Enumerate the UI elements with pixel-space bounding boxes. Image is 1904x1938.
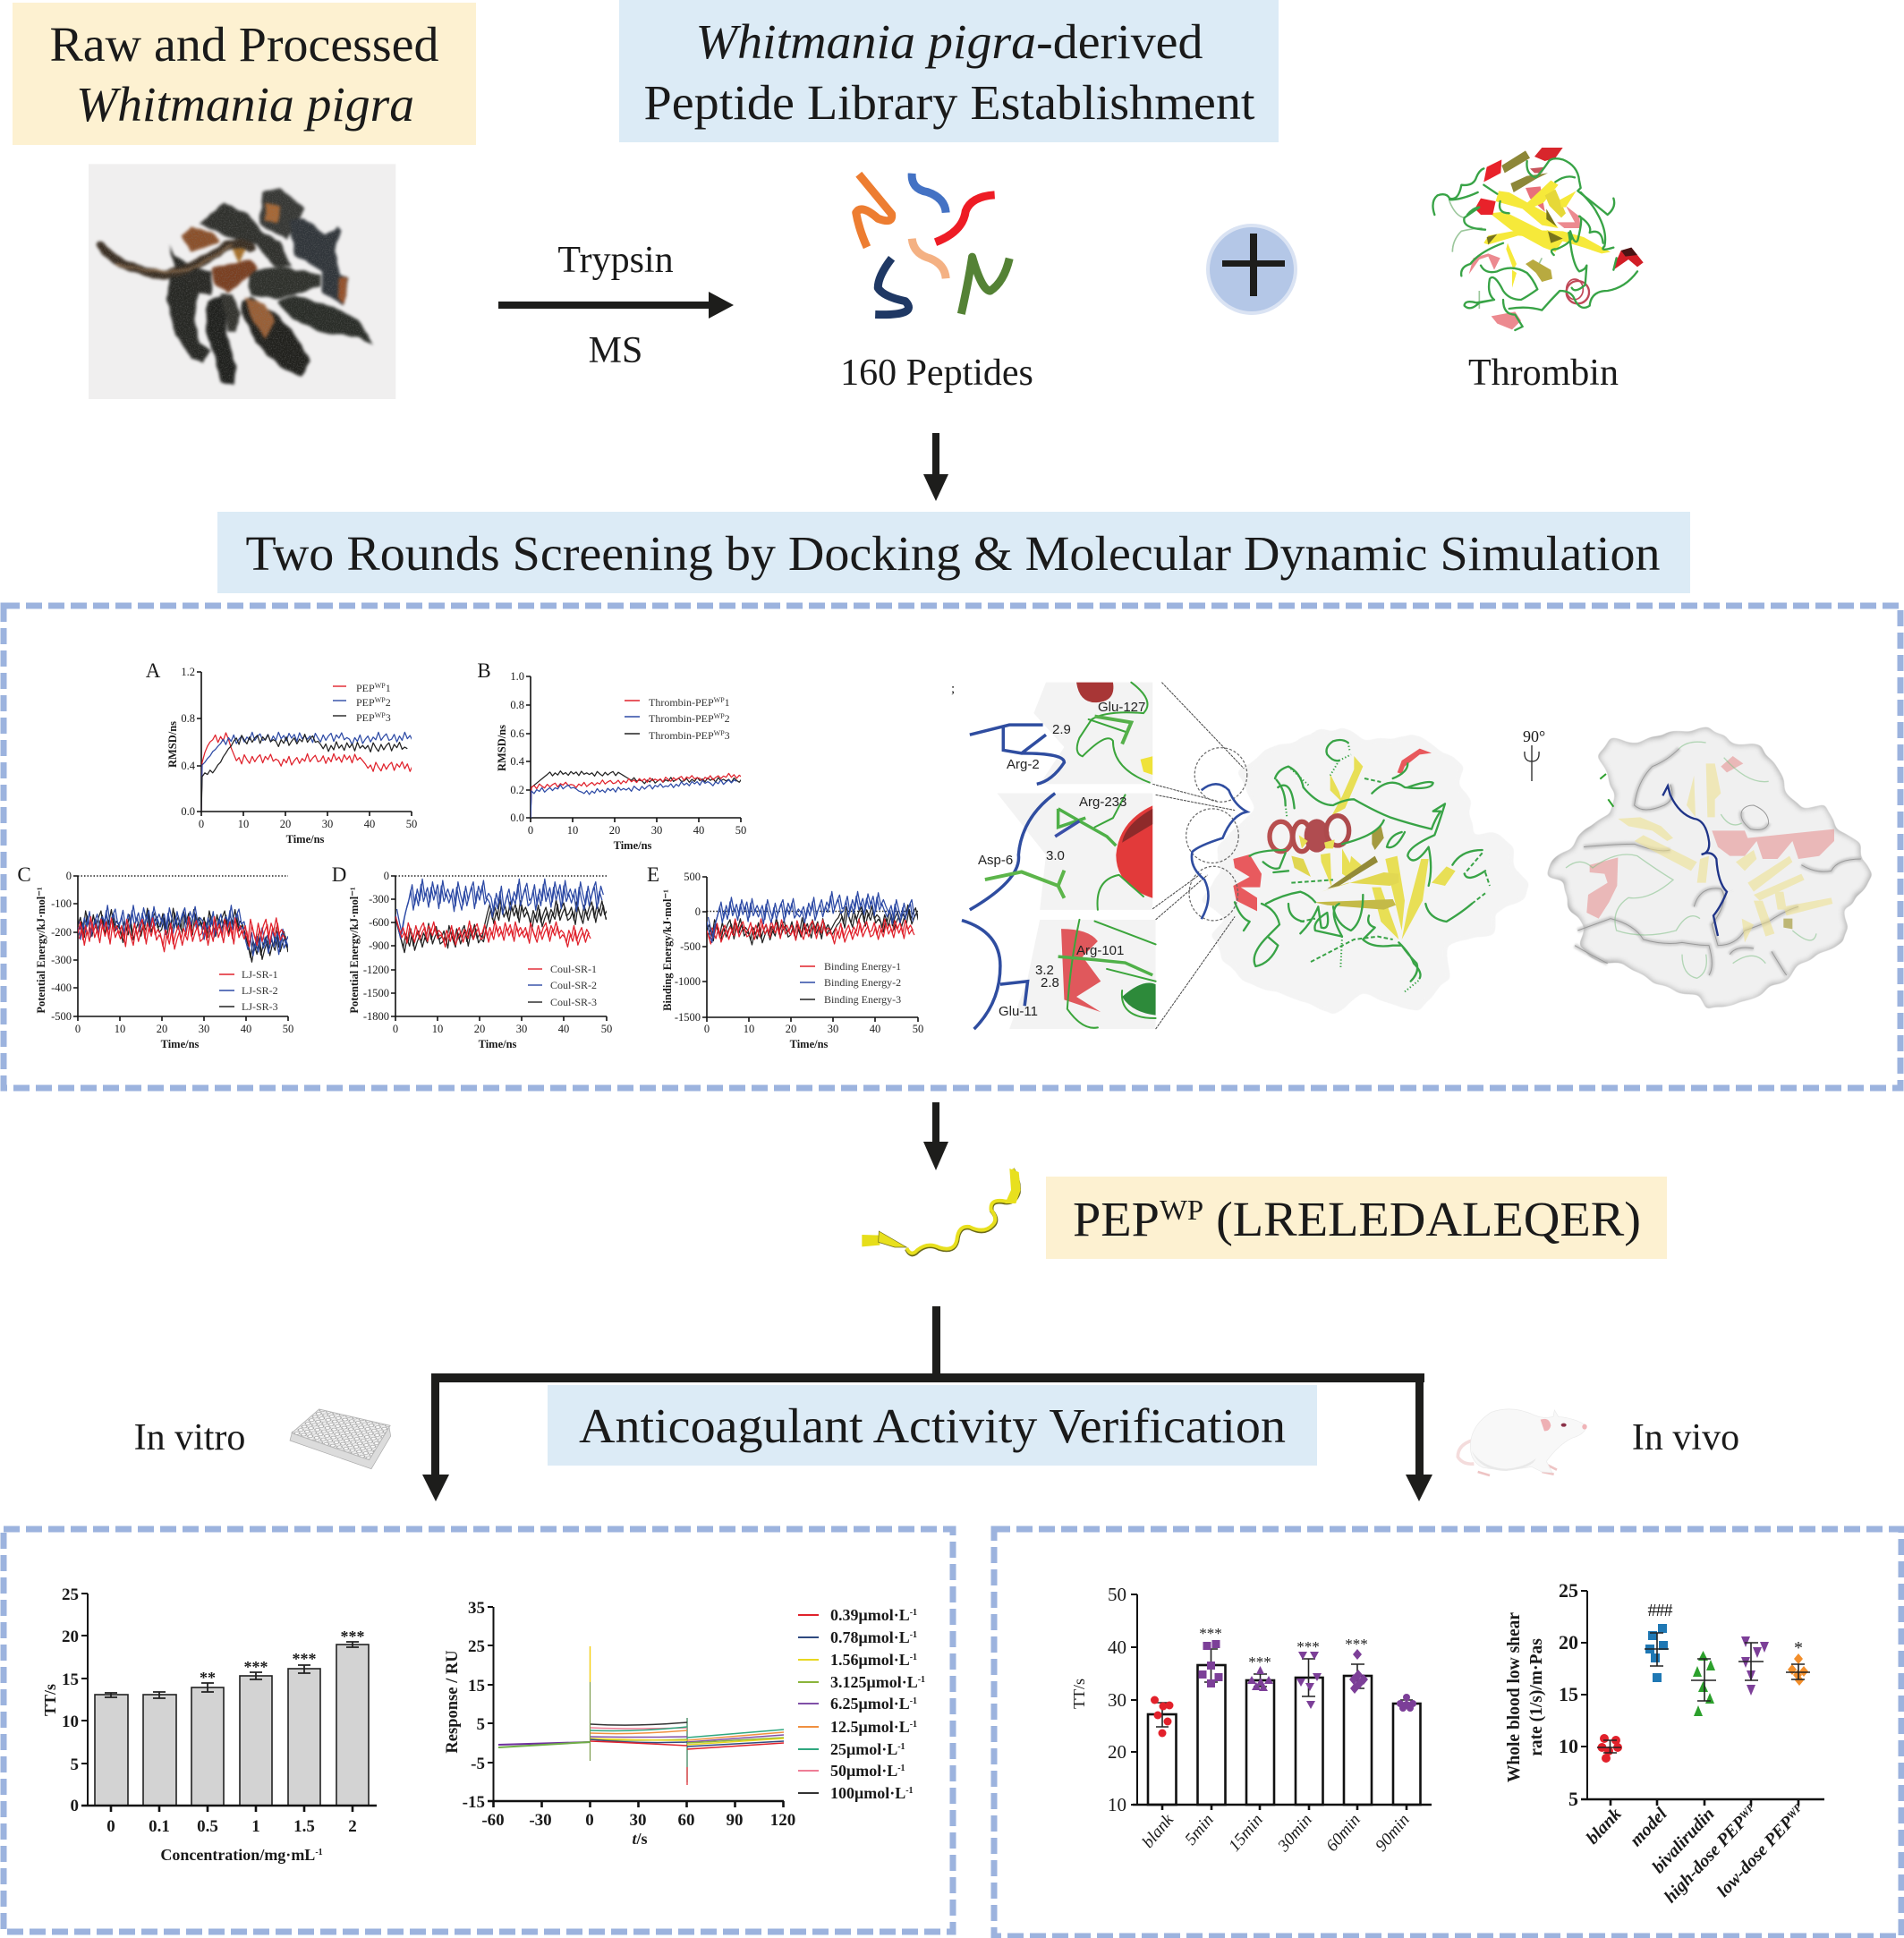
chart C: LJ-SR potential energy: -300 [51, 954, 72, 966]
line chart: SPR sensorgram: 50μmol·L [830, 1762, 897, 1780]
chart B: complex RMSD: 0.4 [510, 755, 525, 768]
bar chart: TT over time: 30 [1108, 1689, 1126, 1711]
chart A: peptide RMSD: 0.0 [181, 805, 195, 818]
chart C: LJ-SR potential energy: 50 [283, 1023, 293, 1035]
inset: Arg-2 Glu-127 contact: 2.9 [1052, 722, 1071, 737]
label: In vitro: In vitro [134, 1417, 245, 1458]
bar chart: TT over time: 60min [1322, 1811, 1364, 1856]
bar chart: TT vs concentration: 0.1 [149, 1817, 170, 1836]
bar chart: TT over time: *** [1248, 1653, 1271, 1670]
chart B: complex RMSD: Time/ns [614, 839, 652, 852]
line chart: SPR sensorgram: -1 [910, 1720, 917, 1730]
bar chart: TT vs concentration: TT/s [41, 1684, 59, 1716]
line chart: SPR sensorgram: 1.56μmol·L [830, 1651, 910, 1669]
chart D: Coul-SR potential energy: -900 [369, 939, 389, 952]
chart C: LJ-SR potential energy: Time/ns [161, 1038, 200, 1050]
chart B: complex RMSD: 2 [725, 712, 730, 725]
chart A: peptide RMSD: 10 [238, 818, 249, 830]
chart A: peptide RMSD: A [146, 659, 161, 682]
icon: microplate [290, 1409, 391, 1469]
chart B: complex RMSD: WP [714, 729, 725, 737]
line chart: SPR sensorgram: 0 [585, 1811, 594, 1830]
inset: Glu-11 Arg-101 contact: 2.8 [1041, 975, 1059, 990]
chart D: Coul-SR potential energy: Potential Energy/kJ·mol⁻¹ [348, 887, 361, 1014]
scatter plot: whole blood low shear rate: 10 [1559, 1735, 1578, 1757]
heading: PEP WP sequence: (LRELEDALEQER) [1203, 1192, 1641, 1246]
line chart: SPR sensorgram: -1 [910, 1630, 917, 1640]
scatter plot: whole blood low shear rate: WP [1784, 1801, 1805, 1822]
chart A: peptide RMSD: 3 [386, 711, 391, 724]
peptide chain and binding-site callouts [1152, 683, 1247, 1029]
heading: PEP WP sequence: PEP [1073, 1192, 1158, 1246]
bar chart: TT over time: 50 [1108, 1584, 1126, 1605]
heading: peptide library establishment [619, 0, 1279, 142]
inset: Glu-11 Arg-101 contact: Glu-11 [999, 1004, 1038, 1019]
line chart: SPR sensorgram: 120 [770, 1811, 795, 1830]
chart A: peptide RMSD: 50 [406, 818, 417, 830]
heading: Raw and Processed Whitmania pigra [13, 3, 476, 145]
icon: peptide fragments [856, 174, 1009, 315]
line chart: SPR sensorgram: 5 [476, 1715, 485, 1734]
bar chart: TT over time: *** [1345, 1636, 1368, 1653]
chart A: peptide RMSD: 0 [199, 818, 204, 830]
bar chart: TT over time: blank [1139, 1810, 1177, 1852]
bar chart: TT vs concentration [41, 1585, 377, 1864]
bar chart: TT over time: TT/s [1070, 1679, 1088, 1709]
scatter plot: whole blood low shear rate: 15 [1559, 1683, 1578, 1705]
chart C: LJ-SR potential energy: 0 [75, 1023, 81, 1035]
scatter plot: whole blood low shear rate: 5 [1568, 1788, 1578, 1810]
arrow: down to screening [923, 433, 948, 501]
chart E: binding energy: -1500 [675, 1011, 701, 1024]
line chart: SPR sensorgram: -1 [910, 1653, 917, 1662]
label: In vivo: In vivo [1632, 1417, 1739, 1458]
bar chart: TT over time: 40 [1108, 1636, 1126, 1658]
chart C: LJ-SR potential energy: LJ-SR-2 [242, 984, 278, 997]
chart D: Coul-SR potential energy: -300 [369, 893, 389, 905]
chart A: peptide RMSD: PEP [356, 696, 375, 709]
scatter plot: whole blood low shear rate: high-dose PEP [1661, 1813, 1750, 1907]
chart D: Coul-SR potential energy: -1200 [363, 964, 389, 976]
chart A: peptide RMSD: WP [375, 682, 386, 690]
bar chart: TT vs concentration: 0 [106, 1817, 115, 1836]
chart B: complex RMSD: 0 [528, 824, 533, 837]
chart B: complex RMSD [477, 659, 746, 852]
panel: docking and molecular dynamics [4, 606, 1900, 1088]
label: 160 Peptides: 160 Peptides [840, 353, 1033, 394]
chart B: complex RMSD: Thrombin-PEP [649, 712, 714, 725]
chart E: binding energy: -500 [680, 940, 701, 953]
bar chart: TT vs concentration: 1 [251, 1817, 260, 1836]
scatter plot: whole blood low shear rate: low-dose PEP [1713, 1813, 1798, 1901]
label: 90 degree rotation [1523, 727, 1545, 781]
chart D: Coul-SR potential energy: 10 [432, 1023, 443, 1035]
bar chart: TT over time: *** [1296, 1638, 1320, 1655]
chart E: binding energy: Binding Energy/kJ·mol⁻¹ [661, 889, 674, 1011]
chart E: binding energy: Binding Energy-1 [824, 960, 901, 973]
chart A: peptide RMSD: 1.2 [181, 666, 195, 678]
chart E: binding energy: Time/ns [790, 1038, 829, 1050]
stray label fragment: ; [951, 682, 955, 696]
scatter plot: whole blood low shear rate [1505, 1579, 1824, 1907]
label: Trypsin: Trypsin [557, 240, 674, 281]
chart C: LJ-SR potential energy: 20 [157, 1023, 167, 1035]
heading: peptide library establishment: Peptide Library Establishment [644, 75, 1254, 130]
bar chart: TT vs concentration: 25 [62, 1585, 79, 1604]
chart E: binding energy: 500 [684, 871, 701, 883]
heading: two rounds screening [217, 512, 1690, 593]
bar chart: TT vs concentration: -1 [315, 1848, 323, 1857]
chart D: Coul-SR potential energy: D [332, 863, 346, 886]
line chart: SPR sensorgram: 6.25μmol·L [830, 1695, 910, 1713]
chart C: LJ-SR potential energy: LJ-SR-1 [242, 968, 278, 981]
heading: PEP WP sequence [1046, 1177, 1667, 1259]
inset: Arg-2 Glu-127 contact [970, 683, 1152, 784]
bar chart: TT vs concentration: 15 [62, 1670, 79, 1689]
line chart: SPR sensorgram: -1 [905, 1786, 914, 1796]
line chart: SPR sensorgram: 35 [468, 1599, 485, 1618]
line chart: SPR sensorgram: Response / RU [444, 1650, 462, 1754]
line chart: SPR sensorgram: -60 [481, 1811, 505, 1830]
heading: Raw and Processed Whitmania pigra: Raw and Processed [50, 17, 438, 72]
bar chart: TT over time: 90min [1372, 1811, 1414, 1856]
chart B: complex RMSD: RMSD/ns [496, 725, 508, 771]
chart C: LJ-SR potential energy: Potential Energy/kJ·mol⁻¹ [35, 887, 47, 1014]
line chart: SPR sensorgram: 15 [468, 1677, 485, 1696]
bar chart: TT vs concentration: 0.5 [197, 1817, 218, 1836]
line chart: SPR sensorgram [444, 1599, 925, 1848]
chart E: binding energy: Binding Energy-2 [824, 976, 901, 989]
heading: Raw and Processed Whitmania pigra: Whitmania pigra [76, 77, 414, 132]
arrow: branching to in vitro and in vivo [422, 1306, 1432, 1501]
label: MS: MS [589, 330, 642, 371]
chart A: peptide RMSD: WP [375, 711, 386, 719]
chart E: binding energy: 0 [695, 905, 701, 918]
chart B: complex RMSD: 10 [567, 824, 578, 837]
chart B: complex RMSD: 3 [725, 729, 730, 742]
chart D: Coul-SR potential energy: 50 [601, 1023, 612, 1035]
chart D: Coul-SR potential energy: 30 [516, 1023, 527, 1035]
chart E: binding energy: 50 [913, 1023, 923, 1035]
panel: in vivo assays [994, 1529, 1901, 1936]
chart A: peptide RMSD: PEP [356, 711, 375, 724]
icon: plus sign [1208, 225, 1296, 313]
chart E: binding energy: -1000 [675, 975, 701, 988]
chart D: Coul-SR potential energy [332, 863, 612, 1050]
line chart: SPR sensorgram: -1 [910, 1696, 917, 1706]
chart E: binding energy: Binding Energy-3 [824, 993, 901, 1006]
inset: Asp-6 Arg-233 contact: Arg-233 [1079, 795, 1126, 810]
chart B: complex RMSD: 1.0 [510, 670, 524, 683]
chart D: Coul-SR potential energy: Time/ns [479, 1038, 517, 1050]
chart C: LJ-SR potential energy: 30 [199, 1023, 209, 1035]
chart D: Coul-SR potential energy: Coul-SR-1 [550, 963, 597, 975]
line chart: SPR sensorgram: 90 [727, 1811, 743, 1830]
chart E: binding energy [647, 863, 923, 1050]
protein surface rotated view [1548, 727, 1872, 1008]
scatter plot: whole blood low shear rate: ### [1648, 1601, 1673, 1620]
chart C: LJ-SR potential energy: 40 [241, 1023, 251, 1035]
icon: white rat [1458, 1409, 1587, 1475]
scatter plot: whole blood low shear rate: model [1626, 1804, 1671, 1850]
line chart: SPR sensorgram: -30 [529, 1811, 552, 1830]
chart E: binding energy: 0 [704, 1023, 710, 1035]
label: Thrombin: Thrombin [1468, 353, 1619, 394]
chart A: peptide RMSD: RMSD/ns [166, 721, 179, 768]
bar chart: TT vs concentration: 0 [70, 1797, 79, 1815]
inset: Glu-11 Arg-101 contact: Arg-101 [1076, 943, 1124, 958]
arrow: trypsin digestion [498, 292, 734, 319]
chart B: complex RMSD: 30 [651, 824, 662, 837]
chart D: Coul-SR potential energy: 0 [393, 1023, 398, 1035]
arrow: down to PEP [923, 1102, 948, 1170]
chart A: peptide RMSD [146, 659, 437, 846]
heading: two rounds screening: Two Rounds Screening by Docking & Molecular Dynamic Simulation [245, 526, 1661, 581]
chart C: LJ-SR potential energy: -100 [51, 897, 72, 910]
bar chart: TT vs concentration: 10 [62, 1713, 79, 1731]
chart A: peptide RMSD: 30 [322, 818, 333, 830]
bar chart: TT vs concentration: ** [200, 1669, 216, 1687]
scatter plot: whole blood low shear rate: bivalirudin [1648, 1804, 1719, 1877]
bar chart: TT vs concentration: 2 [348, 1817, 357, 1836]
bar chart: TT vs concentration: *** [243, 1658, 268, 1676]
chart B: complex RMSD: 1 [725, 696, 730, 709]
chart E: binding energy: 30 [828, 1023, 838, 1035]
chart B: complex RMSD: 50 [735, 824, 746, 837]
line chart: SPR sensorgram: t/s [632, 1830, 648, 1848]
line chart: SPR sensorgram: 25μmol·L [830, 1740, 897, 1758]
inset: Arg-2 Glu-127 contact: Glu-127 [1098, 700, 1145, 715]
inset: Glu-11 Arg-101 contact [962, 920, 1156, 1029]
chart B: complex RMSD: B [477, 659, 491, 682]
chart B: complex RMSD: WP [714, 696, 725, 704]
chart B: complex RMSD: 20 [609, 824, 620, 837]
chart A: peptide RMSD: PEP [356, 682, 375, 694]
scatter plot: whole blood low shear rate: * [1794, 1638, 1803, 1658]
scatter plot: whole blood low shear rate: 25 [1559, 1579, 1578, 1602]
inset: Asp-6 Arg-233 contact: Asp-6 [978, 853, 1013, 868]
bar chart: TT over time [1070, 1584, 1432, 1856]
line chart: SPR sensorgram: -1 [897, 1742, 905, 1752]
line chart: SPR sensorgram: -5 [471, 1755, 485, 1773]
chart C: LJ-SR potential energy [17, 863, 293, 1050]
photo: dried leeches [89, 164, 395, 399]
bar chart: TT vs concentration: Concentration/mg·mL [160, 1846, 315, 1864]
bar chart: TT over time: 20 [1108, 1741, 1126, 1763]
chart C: LJ-SR potential energy: 10 [115, 1023, 125, 1035]
chart D: Coul-SR potential energy: Coul-SR-3 [550, 996, 597, 1008]
scatter plot: whole blood low shear rate: WP [1737, 1801, 1757, 1822]
inset: Glu-11 Arg-101 contact: 3.2 [1035, 963, 1054, 978]
line chart: SPR sensorgram: 100μmol·L [830, 1784, 905, 1802]
chart A: peptide RMSD: 2 [386, 696, 391, 709]
chart D: Coul-SR potential energy: -600 [369, 916, 389, 929]
chart D: Coul-SR potential energy: -1800 [363, 1010, 389, 1023]
chart C: LJ-SR potential energy: -400 [51, 982, 72, 994]
protein surface front view [1202, 727, 1530, 1014]
bar chart: TT over time: 15min [1225, 1811, 1267, 1856]
chart C: LJ-SR potential energy: 0 [66, 870, 72, 882]
chart A: peptide RMSD: WP [375, 696, 386, 704]
heading: PEP WP sequence: WP [1160, 1194, 1203, 1226]
chart B: complex RMSD: 0.0 [510, 812, 524, 824]
chart E: binding energy: 40 [870, 1023, 880, 1035]
scatter plot: whole blood low shear rate: 20 [1559, 1631, 1578, 1653]
line chart: SPR sensorgram: 0.39μmol·L [830, 1606, 910, 1624]
line chart: SPR sensorgram: 12.5μmol·L [830, 1718, 910, 1736]
line chart: SPR sensorgram: 60 [678, 1811, 694, 1830]
chart E: binding energy: 20 [786, 1023, 796, 1035]
scatter plot: whole blood low shear rate: Whole blood low shear [1505, 1612, 1524, 1782]
chart A: peptide RMSD: 40 [364, 818, 375, 830]
inset: Asp-6 Arg-233 contact: 3.0 [1046, 848, 1065, 863]
chart A: peptide RMSD: 1 [386, 682, 391, 694]
bar chart: TT over time: 30min [1274, 1811, 1316, 1856]
chart E: binding energy: E [647, 863, 659, 886]
chart C: LJ-SR potential energy: -200 [51, 926, 72, 939]
bar chart: TT over time: 5min [1181, 1811, 1218, 1849]
inset: Arg-2 Glu-127 contact: Arg-2 [1007, 757, 1040, 772]
bar chart: TT over time: *** [1199, 1625, 1222, 1642]
chart D: Coul-SR potential energy: Coul-SR-2 [550, 979, 597, 991]
icon: thrombin protein ribbon [1432, 148, 1644, 330]
bar chart: TT vs concentration: 1.5 [293, 1817, 315, 1836]
chart B: complex RMSD: WP [714, 712, 725, 720]
chart B: complex RMSD: Thrombin-PEP [649, 729, 714, 742]
chart B: complex RMSD: 0.6 [510, 727, 524, 740]
scatter plot: whole blood low shear rate: rate (1/s)/m·Pas [1527, 1638, 1546, 1756]
chart D: Coul-SR potential energy: -1500 [363, 987, 389, 999]
label: 90 degree rotation: 90° [1523, 727, 1545, 745]
bar chart: TT over time: 10 [1108, 1794, 1126, 1815]
line chart: SPR sensorgram: -15 [463, 1793, 485, 1812]
chart B: complex RMSD: 0.8 [510, 699, 524, 711]
chart A: peptide RMSD: 0.4 [181, 760, 196, 772]
line chart: SPR sensorgram: 0.78μmol·L [830, 1628, 910, 1646]
bar chart: TT vs concentration: 5 [70, 1755, 79, 1774]
chart C: LJ-SR potential energy: -500 [51, 1010, 72, 1023]
chart C: LJ-SR potential energy: LJ-SR-3 [242, 1000, 278, 1013]
scatter plot: whole blood low shear rate: blank [1583, 1804, 1626, 1849]
line chart: SPR sensorgram: 25 [468, 1637, 485, 1656]
line chart: SPR sensorgram: 3.125μmol·L [830, 1673, 918, 1691]
chart E: binding energy: 10 [744, 1023, 754, 1035]
chart A: peptide RMSD: 0.8 [181, 712, 195, 725]
chart B: complex RMSD: Thrombin-PEP [649, 696, 714, 709]
chart D: Coul-SR potential energy: 20 [474, 1023, 485, 1035]
chart B: complex RMSD: 40 [693, 824, 704, 837]
heading: anticoagulant activity verification [548, 1385, 1317, 1466]
line chart: SPR sensorgram: -1 [897, 1764, 905, 1773]
bar chart: TT vs concentration: *** [340, 1628, 365, 1645]
line chart: SPR sensorgram: -1 [910, 1608, 917, 1618]
chart A: peptide RMSD: Time/ns [286, 833, 325, 846]
icon: yellow peptide ribbon [862, 1169, 1021, 1254]
chart B: complex RMSD: 0.2 [510, 784, 524, 796]
heading: anticoagulant activity verification: Anticoagulant Activity Verification [579, 1398, 1286, 1453]
bar chart: TT vs concentration: *** [292, 1650, 317, 1668]
chart C: LJ-SR potential energy: C [17, 863, 31, 886]
panel: in vitro assays [4, 1529, 953, 1932]
line chart: SPR sensorgram: 30 [630, 1811, 646, 1830]
bar chart: TT vs concentration: 20 [62, 1628, 79, 1646]
line chart: SPR sensorgram: -1 [918, 1675, 925, 1685]
chart A: peptide RMSD: 20 [280, 818, 291, 830]
chart D: Coul-SR potential energy: 0 [384, 870, 389, 882]
chart D: Coul-SR potential energy: 40 [558, 1023, 569, 1035]
heading: peptide library establishment: Whitmania pigra-derived [696, 14, 1203, 69]
inset: Asp-6 Arg-233 contact [970, 794, 1152, 910]
